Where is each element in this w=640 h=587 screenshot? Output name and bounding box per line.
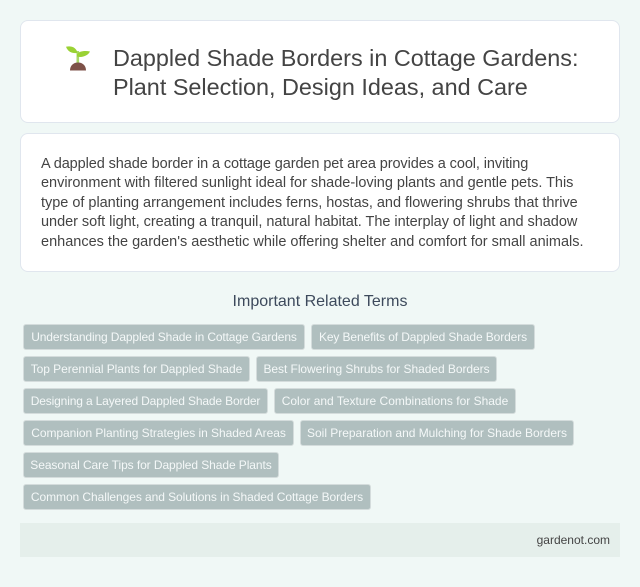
- tag: Soil Preparation and Mulching for Shade Borders: [307, 426, 567, 440]
- icon: seedling: [66, 46, 90, 70]
- description text: under soft light, creating a tranquil, natural habitat. The interplay of light and shadow: [41, 214, 577, 230]
- description text: [41, 156, 584, 250]
- tag: Seasonal Care Tips for Dappled Shade Plants: [30, 458, 272, 472]
- description text: A dappled shade border in a cottage garden pet area provides a cool, inviting: [41, 156, 528, 172]
- title: [113, 45, 579, 100]
- tag: Companion Planting Strategies in Shaded Areas: [31, 426, 286, 440]
- tag: Top Perennial Plants for Dappled Shade: [31, 362, 242, 376]
- tag: [23, 324, 305, 350]
- tag: [300, 420, 574, 446]
- footer bar: [20, 523, 620, 557]
- tag: [274, 388, 516, 414]
- tag: [256, 356, 497, 382]
- tag: [23, 356, 250, 382]
- tag: Key Benefits of Dappled Shade Borders: [319, 330, 527, 344]
- tag: Common Challenges and Solutions in Shaded Cottage Borders: [31, 490, 363, 504]
- description text: type of planting arrangement includes ferns, hostas, and flowering shrubs that thrive: [41, 194, 578, 210]
- description text: environment with filtered sunlight ideal for shade-loving plants and gentle pets. This: [41, 175, 573, 191]
- tag: [311, 324, 535, 350]
- title: Plant Selection, Design Ideas, and Care: [113, 74, 528, 100]
- title: Dappled Shade Borders in Cottage Gardens:: [113, 45, 579, 71]
- tag: [23, 388, 268, 414]
- tag: [23, 452, 279, 478]
- tag: [23, 484, 371, 510]
- related terms heading: Important Related Terms: [233, 293, 407, 310]
- description text: enhances the garden's aesthetic while offering shelter and comfort for small animals.: [41, 234, 584, 250]
- tag: Designing a Layered Dappled Shade Border: [31, 394, 260, 408]
- tag: Color and Texture Combinations for Shade: [282, 394, 508, 408]
- related term tags: [23, 324, 574, 510]
- tag: Best Flowering Shrubs for Shaded Borders: [263, 362, 490, 376]
- footer site name: gardenot.com: [537, 533, 610, 547]
- header card: [20, 20, 620, 123]
- tag: Understanding Dappled Shade in Cottage Gardens: [31, 330, 297, 344]
- tag: [23, 420, 294, 446]
- description card: [20, 133, 620, 272]
